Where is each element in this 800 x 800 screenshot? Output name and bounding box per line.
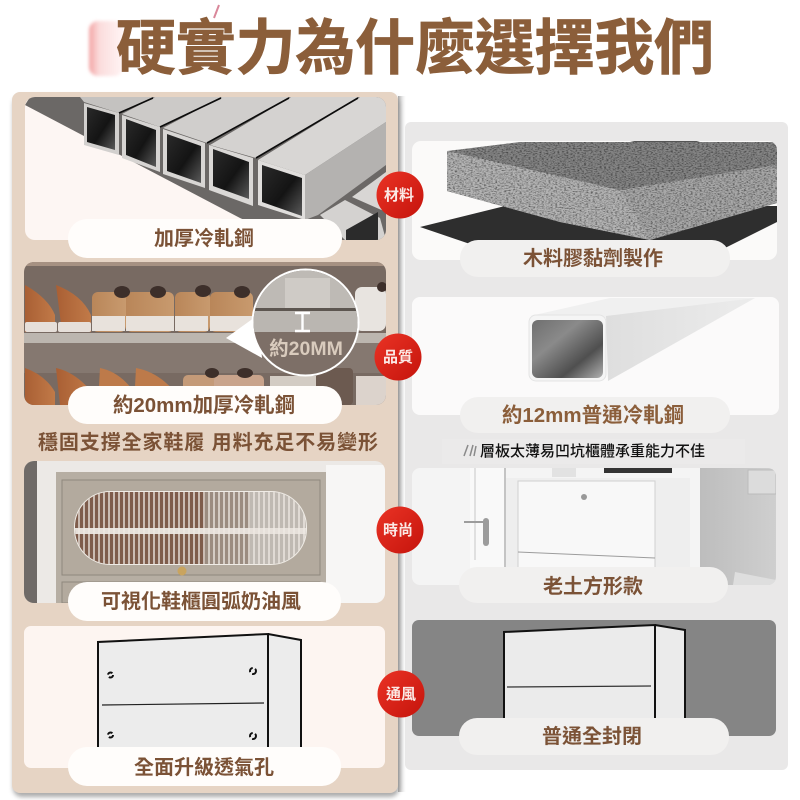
- door handle: [464, 518, 489, 546]
- badge: style: [376, 506, 424, 554]
- warning caption: [442, 439, 745, 464]
- pill: 12mm steel: 約12mm普通冷軋鋼: [502, 404, 684, 427]
- badge: quality: 品質: [383, 349, 413, 366]
- panel: our product: [12, 92, 406, 797]
- badge: ventilation: [378, 670, 424, 718]
- pill: ventilation holes: 全面升級透氣孔: [134, 756, 274, 779]
- badge: style: 時尚: [383, 521, 413, 539]
- pill: fully sealed: [459, 718, 729, 755]
- title: [89, 5, 714, 82]
- steel tubes: [80, 97, 386, 240]
- pill: fully sealed: 普通全封閉: [542, 725, 642, 748]
- dimension mark: [295, 313, 310, 331]
- card: ventilated cabinet: [24, 626, 385, 768]
- badge: ventilation: 通風: [386, 686, 416, 703]
- pill: ventilation holes: [68, 747, 341, 786]
- upper shoes: [25, 282, 387, 332]
- panel: ordinary product: [405, 122, 788, 770]
- board body: [447, 142, 777, 240]
- pill: glued wood: [460, 240, 730, 277]
- pill: old square style: [459, 567, 728, 603]
- card: particle board: [412, 141, 777, 260]
- pill: glued wood: 木料膠黏劑製作: [523, 246, 663, 270]
- pill: visible cabinet: [68, 582, 341, 621]
- badge: quality: [374, 334, 422, 380]
- card: sealed cabinet: [412, 620, 776, 748]
- title text: 硬實力為什麼選擇我們: [116, 15, 714, 82]
- lower shoes: [25, 368, 386, 405]
- pill: 20mm steel: 約20mm加厚冷軋鋼: [113, 394, 295, 417]
- small mark: [464, 445, 476, 456]
- pill: old square style: 老土方形款: [543, 574, 643, 598]
- pill: thick steel: 加厚冷軋鋼: [154, 227, 254, 250]
- card: thick cold-rolled steel: [25, 97, 386, 240]
- shelf caption: 穩固支撐全家鞋履 用料充足不易變形: [38, 430, 378, 454]
- card: shoes on shelf: [24, 262, 387, 405]
- gold knob: [178, 566, 186, 576]
- pill: 12mm steel: [460, 397, 730, 433]
- warning caption: 層板太薄易凹坑櫃體承重能力不佳: [480, 442, 705, 460]
- vent holes: [108, 668, 256, 739]
- pill: visible cabinet: 可視化鞋櫃圓弧奶油風: [101, 590, 301, 613]
- card: old square cabinet: [412, 468, 776, 585]
- magnifier callout: [226, 266, 362, 378]
- pill: 20mm steel: [68, 386, 342, 424]
- brush accent: [89, 5, 219, 76]
- pill: thick steel: [68, 219, 342, 258]
- card: thin steel tube: [412, 297, 779, 415]
- fluted window: [74, 491, 307, 565]
- badge: material: 材料: [384, 186, 414, 204]
- callout label: 約20MM: [269, 338, 343, 360]
- badge: material: [376, 172, 424, 218]
- card: rounded cream cabinet: [24, 461, 385, 603]
